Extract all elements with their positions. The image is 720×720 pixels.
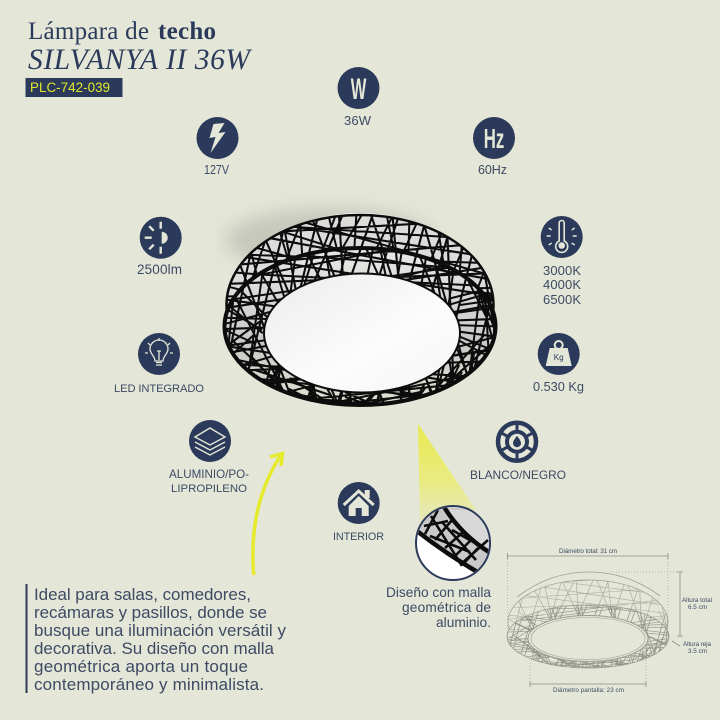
label: color temperatures: 6500K bbox=[543, 292, 581, 307]
detail caption: aluminio. bbox=[436, 615, 491, 630]
description text: Ideal para salas, comedores, bbox=[34, 585, 251, 604]
label: material: LIPROPILENO bbox=[171, 483, 247, 495]
title: SILVANYA II 36W bbox=[28, 44, 252, 76]
label: finish colors: BLANCO/NEGRO bbox=[470, 468, 566, 482]
detail caption bbox=[386, 585, 491, 630]
dimension lines bbox=[508, 553, 683, 687]
icon: luminous flux bbox=[140, 217, 182, 259]
product code badge: PLC-742-039 bbox=[30, 80, 110, 95]
icon: weight bbox=[538, 333, 580, 375]
description bar bbox=[26, 584, 28, 693]
dimension labels: Altura reja bbox=[683, 641, 711, 648]
icon: weight: Kg bbox=[554, 353, 564, 362]
label: material: ALUMINIO/PO- bbox=[169, 468, 249, 481]
label: 60Hz: 60Hz bbox=[478, 163, 507, 177]
icon: LED bulb bbox=[138, 333, 180, 375]
icon: finish color wheel bbox=[498, 423, 536, 461]
label: interior: INTERIOR bbox=[333, 531, 384, 543]
label: 2500lm: 2500lm bbox=[137, 262, 182, 277]
icon: wattage bbox=[338, 67, 380, 109]
description text: decorativa. Su diseño con malla bbox=[34, 639, 275, 658]
technical drawing with dimensions bbox=[494, 548, 712, 694]
title: techo bbox=[158, 18, 216, 45]
arrow bbox=[253, 454, 282, 575]
dimension labels bbox=[553, 548, 712, 694]
icon: frequency bbox=[473, 117, 515, 159]
product code badge bbox=[26, 78, 122, 97]
description text: geométrica aporta un toque bbox=[34, 657, 248, 676]
dimension labels: 3.5 cm bbox=[688, 648, 707, 655]
icon: color temperature bbox=[541, 216, 583, 258]
label: 127V: 127V bbox=[204, 162, 229, 177]
detail caption: Diseño con malla bbox=[386, 585, 491, 600]
icon: material layers bbox=[189, 420, 231, 462]
icon: indoor house bbox=[338, 482, 380, 524]
label: LED INTEGRADO: LED INTEGRADO bbox=[114, 383, 204, 395]
label: color temperatures: 3000K bbox=[543, 263, 581, 278]
detail circle: geometric mesh bbox=[415, 505, 491, 581]
description text: recámaras y pasillos, donde se bbox=[34, 603, 267, 622]
ceiling lamp photo bbox=[222, 202, 498, 407]
icon: wattage: W bbox=[351, 73, 366, 106]
title bbox=[28, 18, 252, 76]
dimension labels: Altura total bbox=[682, 597, 712, 604]
description text: busque una iluminación versátil y bbox=[34, 621, 286, 640]
title: Lámpara de bbox=[28, 18, 149, 45]
spotlight cone bbox=[418, 424, 476, 527]
label: color temperatures bbox=[543, 263, 581, 307]
label: 36W: 36W bbox=[344, 113, 372, 128]
lamp line drawing bbox=[506, 572, 670, 668]
dimension labels: 6.5 cm bbox=[688, 604, 707, 611]
description text: contemporáneo y minimalista. bbox=[34, 675, 264, 694]
dimension labels: Diámetro pantalla: 23 cm bbox=[553, 687, 624, 694]
label: color temperatures: 4000K bbox=[543, 277, 581, 292]
icon: voltage bbox=[196, 117, 238, 159]
description text bbox=[34, 585, 286, 694]
detail caption: geométrica de bbox=[402, 600, 491, 615]
dimension labels: Diámetro total: 31 cm bbox=[559, 548, 617, 555]
label: weight: 0.530 Kg bbox=[533, 379, 584, 394]
icon: frequency: Hz bbox=[484, 123, 504, 154]
label: material bbox=[169, 468, 249, 495]
